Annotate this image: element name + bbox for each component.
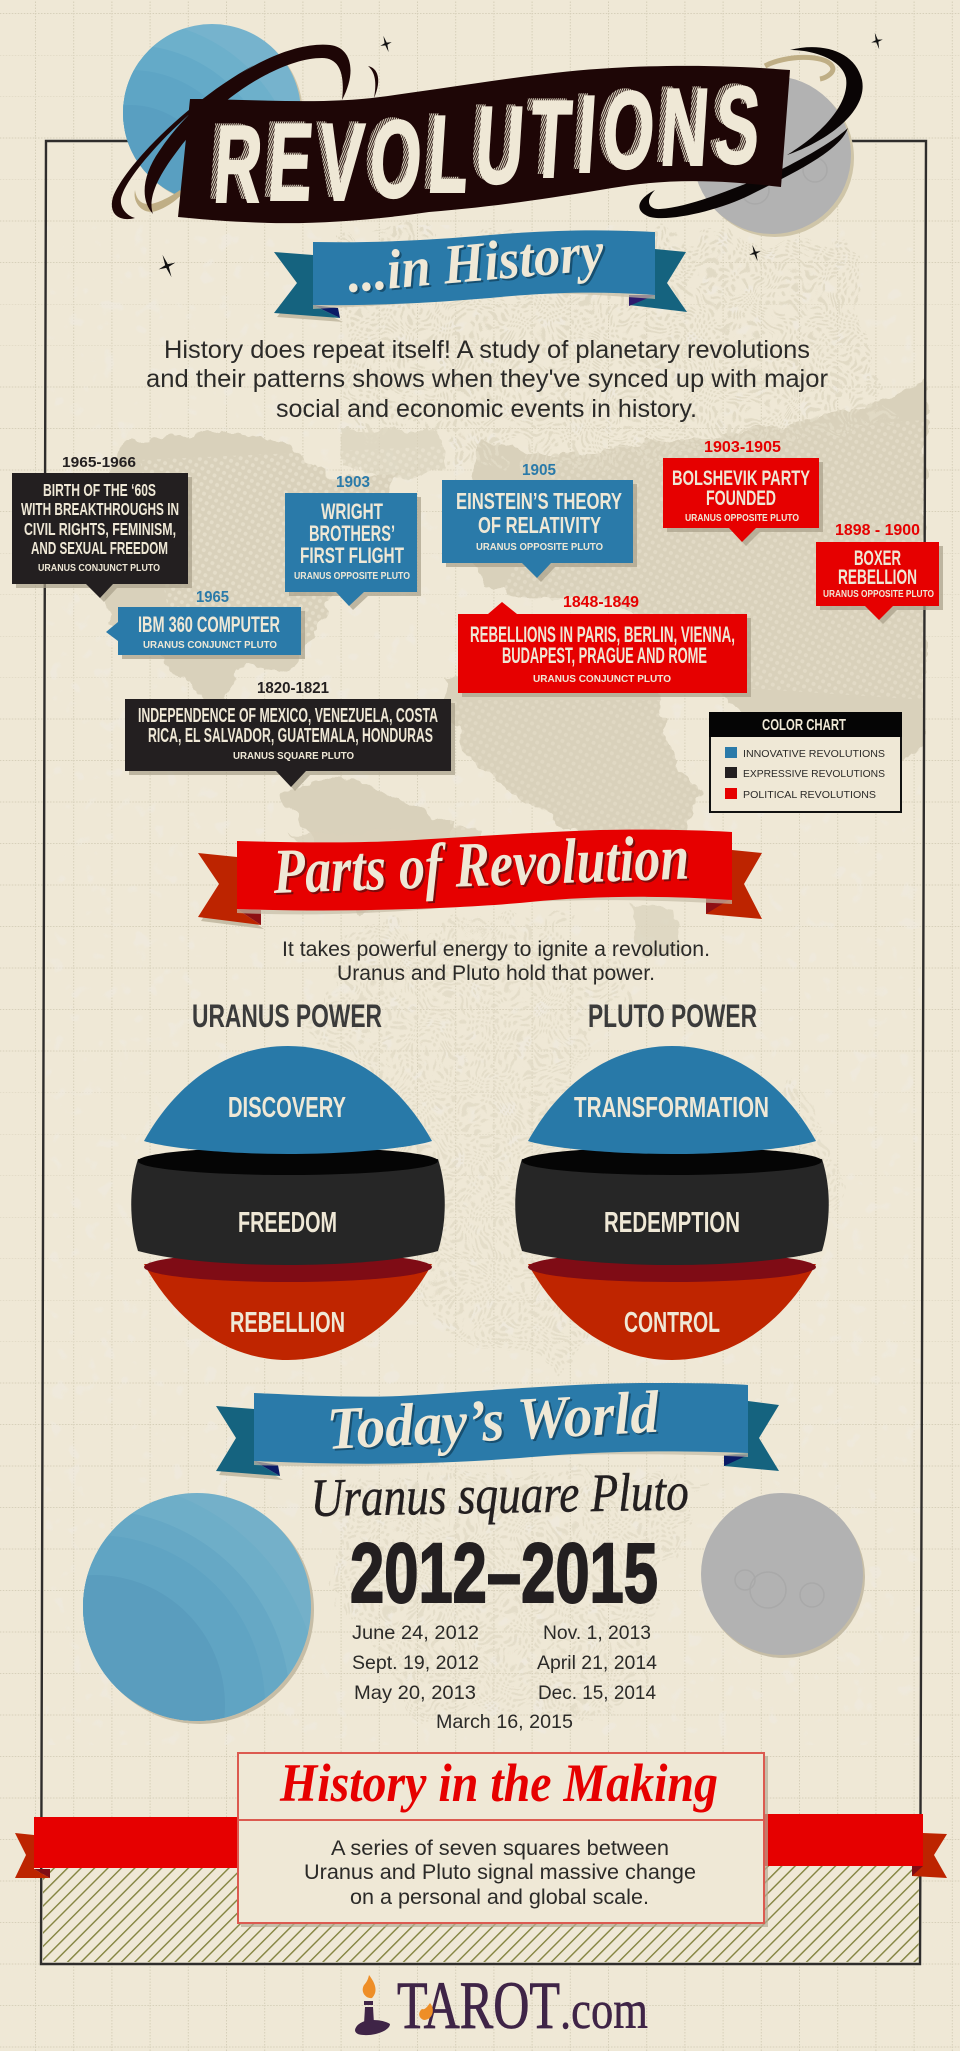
callout: 1965-1966 birth of the 60s: BIRTH OF THE ‘60S [43, 480, 156, 500]
ribbon: in History [274, 221, 687, 322]
list of square dates [352, 1622, 657, 1733]
callout: 1965-1966 birth of the 60s: WITH BREAKTHROUGHS IN [21, 499, 179, 519]
list of square dates: June 24, 2012 [352, 1622, 479, 1644]
parts paragraph: It takes powerful energy to ignite a revolution. [282, 937, 710, 961]
title banner [178, 66, 790, 223]
ribbon: in History: ...in History [345, 221, 607, 305]
hatched footer area [43, 1866, 919, 1962]
callout: 1903-1905 Bolshevik: BOLSHEVIK PARTY [672, 466, 810, 490]
sphere: Pluto power: CONTROL [624, 1307, 720, 1339]
box: History in the Making: History in the Making [279, 1753, 718, 1813]
title text: REVOLUTIONS [210, 65, 770, 226]
callout: 1965 IBM 360: IBM 360 COMPUTER [138, 612, 280, 637]
heading: Pluto power: PLUTO POWER [588, 998, 757, 1034]
stars [154, 31, 885, 280]
grunge splatter texture [46, 225, 921, 1745]
legend: political: POLITICAL REVOLUTIONS [743, 789, 876, 801]
callout: 1898-1900 Boxer: BOXER [854, 546, 901, 570]
sphere: Uranus power [131, 1046, 445, 1360]
list of square dates: Dec. 15, 2014 [538, 1682, 656, 1704]
legend: expressive: EXPRESSIVE REVOLUTIONS [743, 768, 885, 780]
callout: 1965 IBM 360: 1965 [196, 589, 229, 606]
sphere: Pluto power: TRANSFORMATION [574, 1092, 769, 1124]
callout: 1965-1966 birth of the 60s: CIVIL RIGHTS, FEMINISM, [24, 519, 176, 539]
intro paragraph: History does repeat itself! A study of planetary revolutions [164, 336, 810, 364]
callout: 1905 Einstein: EINSTEIN’S THEORY [456, 488, 622, 514]
callout: 1898-1900 Boxer: 1898 - 1900 [835, 522, 920, 539]
callout: 1820-1821 Independence [125, 680, 455, 791]
callout: 1903-1905 Bolshevik: URANUS OPPOSITE PLUTO [685, 512, 799, 524]
callout: 1848-1849 Rebellions: REBELLIONS IN PARIS, BERLIN, VIENNA, [470, 622, 735, 647]
sphere: Pluto power [515, 1046, 829, 1360]
world map background [88, 380, 925, 955]
callout: 1820-1821 Independence: 1820-1821 [257, 680, 329, 697]
ribbon: Parts of Revolution [198, 822, 762, 929]
planet: Pluto large [701, 1493, 865, 1658]
callout: 1903-1905 Bolshevik: 1903-1905 [704, 439, 781, 456]
legend: innovative: INNOVATIVE REVOLUTIONS [743, 748, 885, 760]
red ribbon band [15, 1814, 947, 1878]
list of square dates: May 20, 2013 [354, 1682, 476, 1704]
sphere: Pluto power: REDEMPTION [604, 1207, 740, 1239]
ribbon: Parts of Revolution: Parts of Revolution [271, 822, 690, 907]
callout: 1965-1966 birth of the 60s: 1965-1966 [62, 454, 136, 471]
callout: 1898-1900 Boxer: REBELLION [838, 565, 917, 589]
list of square dates: April 21, 2014 [537, 1652, 657, 1674]
list of square dates: Nov. 1, 2013 [543, 1622, 651, 1644]
callout: 1905 Einstein [442, 462, 637, 582]
list of square dates: March 16, 2015 [436, 1711, 573, 1733]
box: History in the Making: A series of seven squares between [331, 1836, 669, 1860]
callout: 1965-1966 birth of the 60s [12, 454, 192, 602]
sphere: Uranus power: FREEDOM [238, 1207, 337, 1239]
box: History in the Making: Uranus and Pluto signal massive change [304, 1860, 696, 1884]
intro paragraph [146, 336, 828, 423]
callout: 1903 Wright brothers: FIRST FLIGHT [300, 543, 404, 568]
ribbon: in History: ...in History [347, 223, 609, 307]
callout: 1820-1821 Independence: RICA, EL SALVADOR, GUATEMALA, HONDURAS [148, 725, 433, 747]
callout: 1903 Wright brothers: BROTHERS’ [309, 521, 395, 546]
callout: 1848-1849 Rebellions: BUDAPEST, PRAGUE AND ROME [502, 643, 707, 668]
orbit rings [112, 45, 863, 219]
intro paragraph: social and economic events in history. [276, 395, 697, 423]
callout: 1820-1821 Independence: INDEPENDENCE OF MEXICO, VENEZUELA, COSTA [138, 705, 438, 727]
sphere: Uranus power: DISCOVERY [228, 1092, 346, 1124]
callout: 1903 Wright brothers: URANUS OPPOSITE PLUTO [294, 570, 410, 582]
parts paragraph: Uranus and Pluto hold that power. [337, 961, 655, 985]
legend: color chart [709, 712, 902, 812]
planet: Uranus large [83, 1493, 314, 1724]
list of square dates: Sept. 19, 2012 [352, 1652, 479, 1674]
callout: 1905 Einstein: 1905 [522, 462, 556, 479]
heading: Uranus power: URANUS POWER [192, 998, 382, 1034]
legend: color chart: COLOR CHART [762, 717, 846, 734]
title text: REVOLUTIONS [204, 62, 764, 223]
parts paragraph [282, 937, 710, 985]
planet: Uranus small [0, 20, 303, 360]
callout: 1903-1905 Bolshevik [663, 439, 823, 546]
large years: 2012–2015: 2012–2015 [350, 1526, 658, 1620]
callout: 1820-1821 Independence: URANUS SQUARE PLUTO [233, 750, 354, 762]
icon: flame on A [419, 2003, 433, 2020]
logo: Tarot.com: TAROT [397, 1967, 560, 2043]
callout: 1898-1900 Boxer: URANUS OPPOSITE PLUTO [823, 589, 934, 600]
callout: 1905 Einstein: OF RELATIVITY [478, 512, 601, 538]
ribbon: Today's World: Today’s World [325, 1379, 661, 1462]
callout: 1965 IBM 360 [106, 589, 305, 659]
callout: 1903-1905 Bolshevik: FOUNDED [706, 486, 776, 510]
subheading: Uranus square Pluto: Uranus square Pluto [310, 1461, 689, 1528]
intro paragraph: and their patterns shows when they've synced up with major [146, 365, 828, 393]
callout: 1965 IBM 360: URANUS CONJUNCT PLUTO [143, 639, 277, 651]
halftone texture patches [320, 235, 880, 1720]
ribbon: Today's World [216, 1379, 779, 1480]
box: History in the Making: on a personal and global scale. [350, 1885, 649, 1909]
callout: 1965-1966 birth of the 60s: URANUS CONJUNCT PLUTO [38, 562, 160, 574]
ribbon: Parts of Revolution: Parts of Revolution [273, 823, 692, 909]
callout: 1848-1849 Rebellions: 1848-1849 [563, 594, 639, 611]
callout: 1905 Einstein: URANUS OPPOSITE PLUTO [476, 541, 603, 553]
logo: Tarot.com: .com [560, 1980, 648, 2040]
callout: 1903 Wright brothers: 1903 [336, 474, 370, 491]
box: History in the Making [238, 1753, 768, 1927]
icon: candle [355, 1975, 390, 2035]
callout: 1965-1966 birth of the 60s: AND SEXUAL FREEDOM [31, 538, 168, 558]
callout: 1848-1849 Rebellions [458, 594, 751, 697]
sphere: Uranus power: REBELLION [230, 1307, 345, 1339]
title block: planets, rings and banner [112, 24, 883, 277]
callout: 1903 Wright brothers [285, 474, 421, 610]
ribbon: Today's World: Today’s World [327, 1381, 663, 1464]
callout: 1848-1849 Rebellions: URANUS CONJUNCT PLUTO [533, 673, 671, 685]
callout: 1903 Wright brothers: WRIGHT [321, 499, 383, 524]
planet: Pluto small [693, 76, 854, 237]
callout: 1898-1900 Boxer [816, 522, 943, 624]
